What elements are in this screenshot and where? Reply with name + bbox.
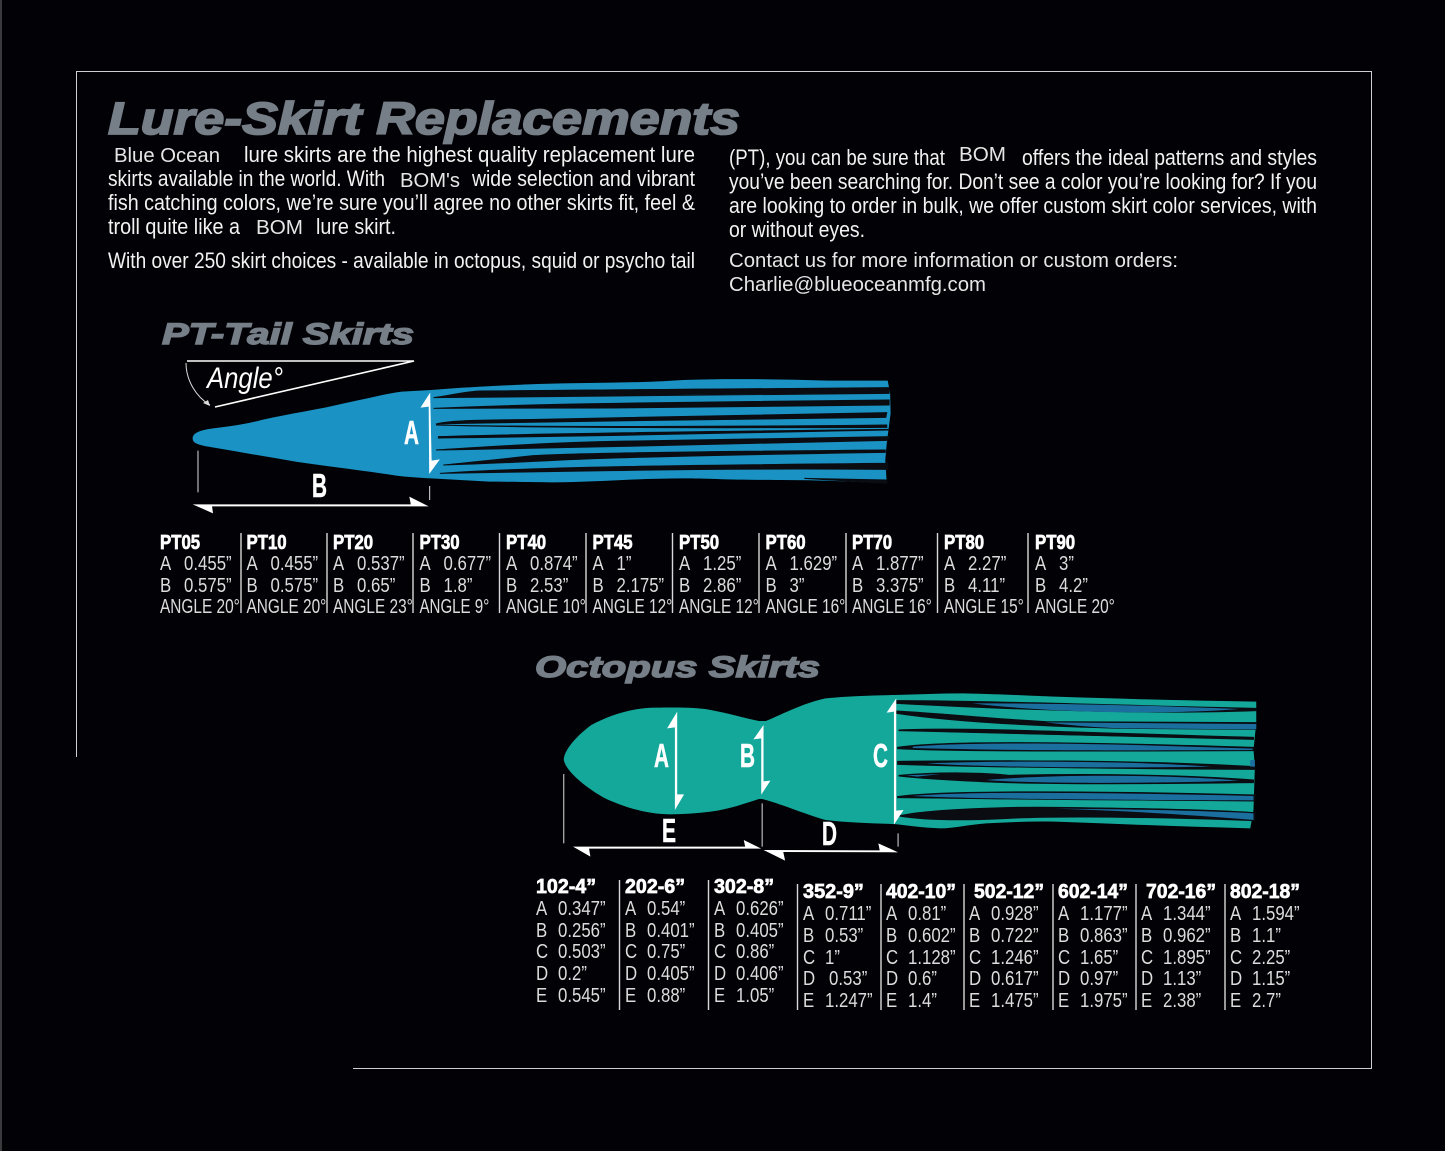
column PT70: ANGLE 16° <box>852 595 932 617</box>
column PT70: 3.375” <box>876 574 924 596</box>
column 502-12: 1.246” <box>991 946 1039 968</box>
column 302-8: 302-8” <box>714 875 774 897</box>
heading: PT-Tail Skirts: PT-Tail Skirts <box>162 318 414 351</box>
text block: right intro and contact: you’ve been searching for. Don’t see a color you’re looking for? If you <box>729 169 1317 194</box>
column PT45 <box>592 531 672 617</box>
column 102-4: E <box>536 984 547 1006</box>
column 802-18: A <box>1230 902 1242 924</box>
column PT10: 0.455” <box>271 552 318 574</box>
column 352-9: D <box>803 967 815 989</box>
column 202-6: 0.54” <box>647 897 685 919</box>
column 402-10: E <box>886 989 897 1011</box>
column 302-8: B <box>714 919 725 941</box>
strand gaps <box>434 388 889 483</box>
column PT05: A <box>160 552 172 574</box>
column 202-6: B <box>625 919 636 941</box>
column PT80: 2.27” <box>968 552 1006 574</box>
skirt body <box>193 379 891 483</box>
column 352-9: 0.53” <box>825 924 863 946</box>
column 302-8: E <box>714 984 725 1006</box>
column 502-12: B <box>969 924 980 946</box>
column 802-18: D <box>1230 967 1242 989</box>
column 502-12: 1.475” <box>991 989 1039 1011</box>
column 502-12: 502-12” <box>974 880 1044 902</box>
text block: right intro and contact: Contact us for more information or custom orders: <box>729 250 1178 272</box>
column 402-10: 402-10” <box>886 880 956 902</box>
column 702-16: 2.38” <box>1163 989 1201 1011</box>
column 352-9: B <box>803 924 814 946</box>
column 802-18: B <box>1230 924 1241 946</box>
column PT60 <box>766 531 845 617</box>
column 602-14: 0.97” <box>1080 967 1118 989</box>
column 402-10: 0.6” <box>908 967 937 989</box>
column 402-10: C <box>886 946 898 968</box>
column PT90: 3” <box>1059 552 1074 574</box>
column PT20: PT20 <box>333 531 373 553</box>
column 402-10: 1.4” <box>908 989 937 1011</box>
column PT80 <box>944 531 1024 617</box>
column PT20: 0.537” <box>357 552 405 574</box>
column PT70: PT70 <box>852 531 892 553</box>
text block: left intro: troll quite like a <box>108 214 241 239</box>
column PT30: PT30 <box>420 531 460 553</box>
column PT45: B <box>592 574 604 596</box>
column 802-18: 2.7” <box>1252 989 1281 1011</box>
column PT20 <box>333 531 413 617</box>
column PT05: ANGLE 20° <box>160 595 240 617</box>
column 352-9: C <box>803 946 815 968</box>
column PT30: B <box>420 574 431 596</box>
column 502-12: E <box>969 989 980 1011</box>
column PT70: B <box>852 574 863 596</box>
column 302-8: 0.406” <box>736 962 784 984</box>
column PT45: ANGLE 12° <box>592 595 672 617</box>
column 602-14: A <box>1058 902 1070 924</box>
text block: right intro and contact: offers the ideal patterns and styles <box>1022 145 1317 170</box>
column PT20: 0.65” <box>357 574 395 596</box>
diagram: octopus skirt <box>564 693 1256 861</box>
text block: right intro and contact: (PT), you can be sure that <box>729 145 945 170</box>
column 352-9: 0.53” <box>829 967 867 989</box>
column 702-16: 702-16” <box>1146 880 1216 902</box>
column PT45: A <box>592 552 604 574</box>
arrow E <box>573 840 761 857</box>
column 702-16 <box>1141 880 1216 1011</box>
column 602-14: 602-14” <box>1058 880 1128 902</box>
column PT60: A <box>766 552 777 574</box>
label E: E <box>662 812 676 849</box>
column 502-12 <box>969 880 1044 1011</box>
column 202-6: 0.401” <box>647 919 695 941</box>
column PT30 <box>420 531 491 617</box>
column 602-14: B <box>1058 924 1069 946</box>
frame border <box>76 72 1372 1068</box>
column PT10: PT10 <box>246 531 287 553</box>
column PT90: ANGLE 20° <box>1035 595 1115 617</box>
column PT10: B <box>246 574 258 596</box>
column PT50 <box>679 531 759 617</box>
column 102-4: 102-4” <box>536 875 596 897</box>
column 702-16: 1.13” <box>1163 967 1201 989</box>
column 402-10: 0.81” <box>908 902 946 924</box>
column 302-8: A <box>714 897 726 919</box>
column 502-12: C <box>969 946 981 968</box>
column PT60: PT60 <box>766 531 806 553</box>
text block: left intro: Blue Ocean <box>114 145 220 167</box>
text block: right intro and contact: are looking to order in bulk, we offer custom skirt color services, with <box>729 193 1317 218</box>
column 202-6: A <box>625 897 637 919</box>
column PT45: PT45 <box>592 531 633 553</box>
column PT90: 4.2” <box>1059 574 1088 596</box>
column PT05: 0.455” <box>184 552 232 574</box>
text block: left intro: BOM <box>256 217 303 239</box>
text block: left intro: lure skirt. <box>316 214 396 239</box>
label B: B <box>312 467 327 504</box>
column PT60: B <box>766 574 777 596</box>
column PT80: A <box>944 552 956 574</box>
text block: left intro: With over 250 skirt choices - available in octopus, squid or psycho tail <box>108 248 695 273</box>
column 602-14 <box>1058 880 1128 1011</box>
column 602-14: 1.975” <box>1080 989 1128 1011</box>
label A: A <box>404 414 419 451</box>
column 702-16: E <box>1141 989 1152 1011</box>
column 352-9: 1.247” <box>825 989 873 1011</box>
text block: right intro and contact: Charlie@blueoceanmfg.com <box>729 274 986 296</box>
column PT05 <box>160 531 240 617</box>
column 302-8: D <box>714 962 726 984</box>
arrow C <box>887 698 904 825</box>
column 502-12: 0.722” <box>991 924 1039 946</box>
column 202-6: 0.405” <box>647 962 695 984</box>
column 402-10 <box>886 880 956 1011</box>
column 702-16: C <box>1141 946 1153 968</box>
column 702-16: 1.895” <box>1163 946 1211 968</box>
column PT60: ANGLE 16° <box>766 595 845 617</box>
column PT30: ANGLE 9° <box>420 595 489 617</box>
column PT60: 1.629” <box>790 552 837 574</box>
column PT90: B <box>1035 574 1046 596</box>
column 602-14: 0.863” <box>1080 924 1128 946</box>
column 602-14: 1.177” <box>1080 902 1128 924</box>
column 202-6: E <box>625 984 636 1006</box>
column PT70: A <box>852 552 864 574</box>
column PT50: 1.25” <box>703 552 741 574</box>
column PT40 <box>506 531 586 617</box>
column PT05: 0.575” <box>184 574 232 596</box>
column 352-9: 1” <box>825 946 840 968</box>
text block: left intro: skirts available in the world. With <box>108 166 385 191</box>
column 302-8: 1.05” <box>736 984 774 1006</box>
column 102-4: B <box>536 919 547 941</box>
column 352-9: E <box>803 989 814 1011</box>
column 402-10: B <box>886 924 897 946</box>
column PT10 <box>246 531 326 617</box>
column 702-16: A <box>1141 902 1153 924</box>
column 502-12: D <box>969 967 981 989</box>
column 802-18: 1.1” <box>1252 924 1281 946</box>
column PT20: ANGLE 23° <box>333 595 413 617</box>
column PT50: ANGLE 12° <box>679 595 759 617</box>
column PT90: PT90 <box>1035 531 1075 553</box>
text block: left intro: BOM's <box>400 170 460 192</box>
column PT20: B <box>333 574 344 596</box>
table: PT-tail sizes <box>160 531 1115 617</box>
skirt body <box>564 693 1256 828</box>
column 302-8: 0.405” <box>736 919 784 941</box>
arrow A <box>420 393 440 474</box>
column 102-4: A <box>536 897 548 919</box>
column 802-18: E <box>1230 989 1241 1011</box>
text block: left intro: wide selection and vibrant <box>471 166 695 191</box>
column 202-6 <box>625 875 695 1006</box>
heading: Octopus Skirts: Octopus Skirts <box>535 651 820 684</box>
column 352-9: A <box>803 902 815 924</box>
column 602-14: C <box>1058 946 1070 968</box>
column PT30: 1.8” <box>444 574 472 596</box>
column 102-4: 0.347” <box>558 897 606 919</box>
label B: B <box>740 737 755 774</box>
column PT50: A <box>679 552 691 574</box>
column 702-16: B <box>1141 924 1152 946</box>
column 102-4: 0.256” <box>558 919 606 941</box>
column 202-6: 0.75” <box>647 940 685 962</box>
diagram: angle indicator <box>186 361 414 407</box>
column PT30: 0.677” <box>444 552 491 574</box>
arrow B <box>193 497 429 513</box>
label A: A <box>654 737 669 774</box>
column 202-6: D <box>625 962 637 984</box>
column 802-18: 1.15” <box>1252 967 1290 989</box>
column 802-18 <box>1230 880 1300 1011</box>
column 402-10: 1.128” <box>908 946 956 968</box>
column 202-6: 202-6” <box>625 875 685 897</box>
column 602-14: E <box>1058 989 1069 1011</box>
text block: right intro and contact: BOM <box>959 144 1006 166</box>
column PT10: 0.575” <box>271 574 318 596</box>
column 352-9: 0.711” <box>825 902 871 924</box>
column 802-18: 802-18” <box>1230 880 1300 902</box>
column PT50: B <box>679 574 690 596</box>
table: octopus sizes <box>536 875 1300 1011</box>
column PT10: ANGLE 20° <box>246 595 326 617</box>
text block: left intro <box>108 142 695 273</box>
column 302-8: 0.626” <box>736 897 784 919</box>
column 702-16: 1.344” <box>1163 902 1211 924</box>
column 102-4: 0.2” <box>558 962 587 984</box>
column PT45: 1” <box>617 552 631 574</box>
column 102-4 <box>536 875 606 1006</box>
column PT60: 3” <box>790 574 804 596</box>
column 502-12: 0.617” <box>991 967 1039 989</box>
column 802-18: 2.25” <box>1252 946 1290 968</box>
text block: right intro and contact: or without eyes. <box>729 217 865 242</box>
column 102-4: C <box>536 940 548 962</box>
column PT50: 2.86” <box>703 574 741 596</box>
column 602-14: D <box>1058 967 1070 989</box>
column PT40: B <box>506 574 517 596</box>
column 352-9 <box>803 880 873 1011</box>
arrow D <box>764 843 898 861</box>
extent ticks <box>198 451 430 500</box>
column 402-10: 0.602” <box>908 924 956 946</box>
dark strand gaps <box>897 701 1256 821</box>
text block: left intro: fish catching colors, we’re sure you’ll agree no other skirts fit, feel & <box>108 190 695 215</box>
column PT50: PT50 <box>679 531 719 553</box>
column 302-8: C <box>714 940 726 962</box>
column 702-16: D <box>1141 967 1153 989</box>
column PT70 <box>852 531 932 617</box>
column 502-12: A <box>969 902 981 924</box>
column PT80: 4.11” <box>968 574 1005 596</box>
column PT40: 2.53” <box>530 574 568 596</box>
column PT20: A <box>333 552 345 574</box>
column PT10: A <box>246 552 258 574</box>
label D: D <box>822 815 837 852</box>
column 302-8 <box>714 875 784 1006</box>
column PT40: PT40 <box>506 531 546 553</box>
arrow B <box>753 725 770 795</box>
column 102-4: D <box>536 962 548 984</box>
column 352-9: 352-9” <box>803 880 864 902</box>
column PT80: B <box>944 574 955 596</box>
arrow A <box>667 712 684 810</box>
column PT80: PT80 <box>944 531 984 553</box>
column 702-16: 0.962” <box>1163 924 1211 946</box>
text block: left intro: lure skirts are the highest quality replacement lure <box>244 142 695 167</box>
column 302-8: 0.86” <box>736 940 774 962</box>
column PT90 <box>1035 531 1115 617</box>
label C: C <box>873 737 888 774</box>
column PT45: 2.175” <box>617 574 664 596</box>
column PT05: PT05 <box>160 531 200 553</box>
dark blue strands <box>906 703 1256 820</box>
column 802-18: C <box>1230 946 1242 968</box>
column PT70: 1.877” <box>876 552 924 574</box>
column 202-6: C <box>625 940 637 962</box>
column PT40: ANGLE 10° <box>506 595 586 617</box>
column 102-4: 0.545” <box>558 984 606 1006</box>
column PT05: B <box>160 574 171 596</box>
column 602-14: 1.65” <box>1080 946 1118 968</box>
column PT80: ANGLE 15° <box>944 595 1024 617</box>
column 502-12: 0.928” <box>991 902 1039 924</box>
column 402-10: D <box>886 967 898 989</box>
text block: right intro and contact <box>729 144 1317 296</box>
column 802-18: 1.594” <box>1252 902 1300 924</box>
column PT90: A <box>1035 552 1047 574</box>
diagram: PT-tail skirt <box>193 379 891 513</box>
column 102-4: 0.503” <box>558 940 606 962</box>
column PT40: 0.874” <box>530 552 578 574</box>
column 402-10: A <box>886 902 898 924</box>
column PT30: A <box>420 552 431 574</box>
title: Lure-Skirt Replacements <box>108 93 740 144</box>
extent ticks <box>564 774 898 847</box>
column 202-6: 0.88” <box>647 984 685 1006</box>
column PT40: A <box>506 552 518 574</box>
diagram: angle indicator: Angle° <box>205 362 283 395</box>
